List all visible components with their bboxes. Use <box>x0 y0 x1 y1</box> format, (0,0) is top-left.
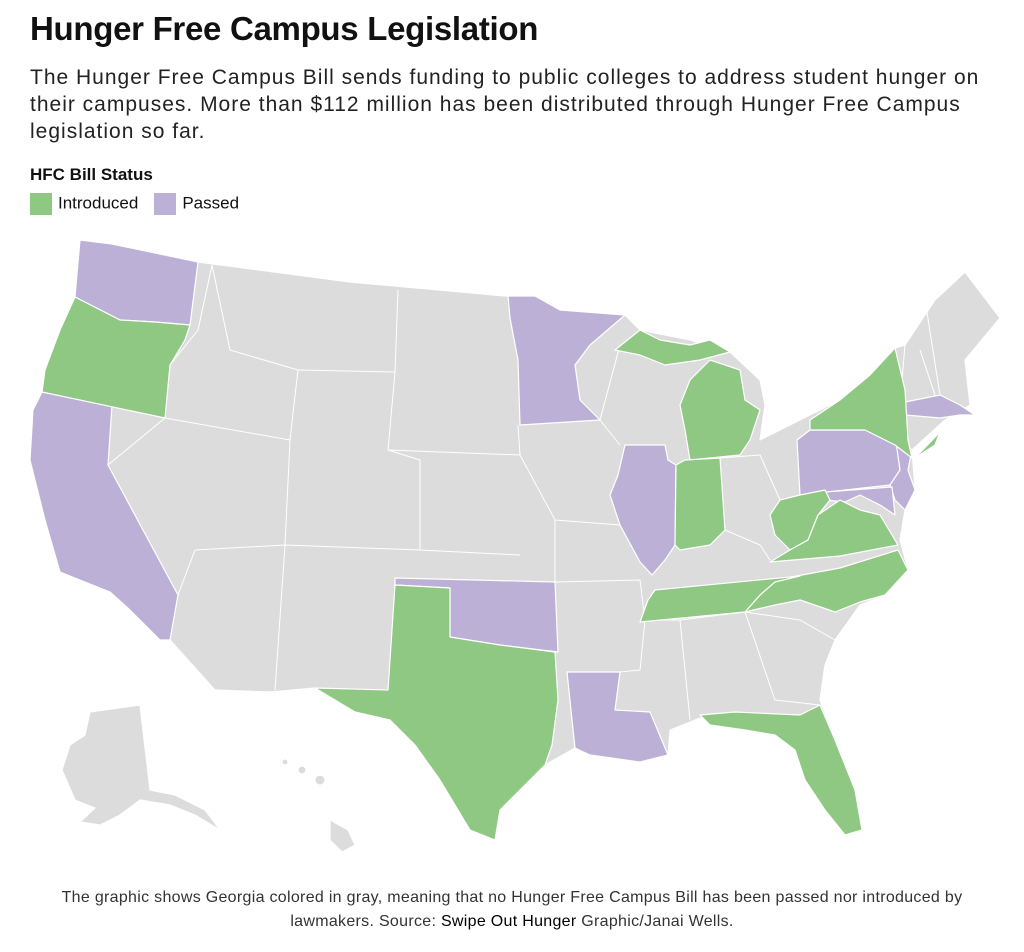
footer: The graphic shows Georgia colored in gray, meaning that no Hunger Free Campus Bill has been passed nor introduced by <box>62 889 962 906</box>
alaska <box>62 705 220 830</box>
gray base US <box>30 240 1000 840</box>
legend <box>30 165 239 215</box>
legend: Introduced <box>58 193 138 212</box>
hawaii <box>282 759 355 852</box>
footer <box>62 889 962 930</box>
title: Hunger Free Campus Legislation <box>30 10 538 47</box>
legend: HFC Bill Status <box>30 165 153 184</box>
subtitle: The Hunger Free Campus Bill sends funding to public colleges to address student hunger on their campuses. More than $112 million has been distributed through Hunger Free Campus legislation so far. <box>30 66 979 143</box>
introduced states <box>42 297 940 840</box>
footer: lawmakers. Source: Swipe Out Hunger Graphic/Janai Wells. <box>290 913 734 930</box>
passed states <box>30 240 975 762</box>
legend: Passed <box>182 193 239 212</box>
